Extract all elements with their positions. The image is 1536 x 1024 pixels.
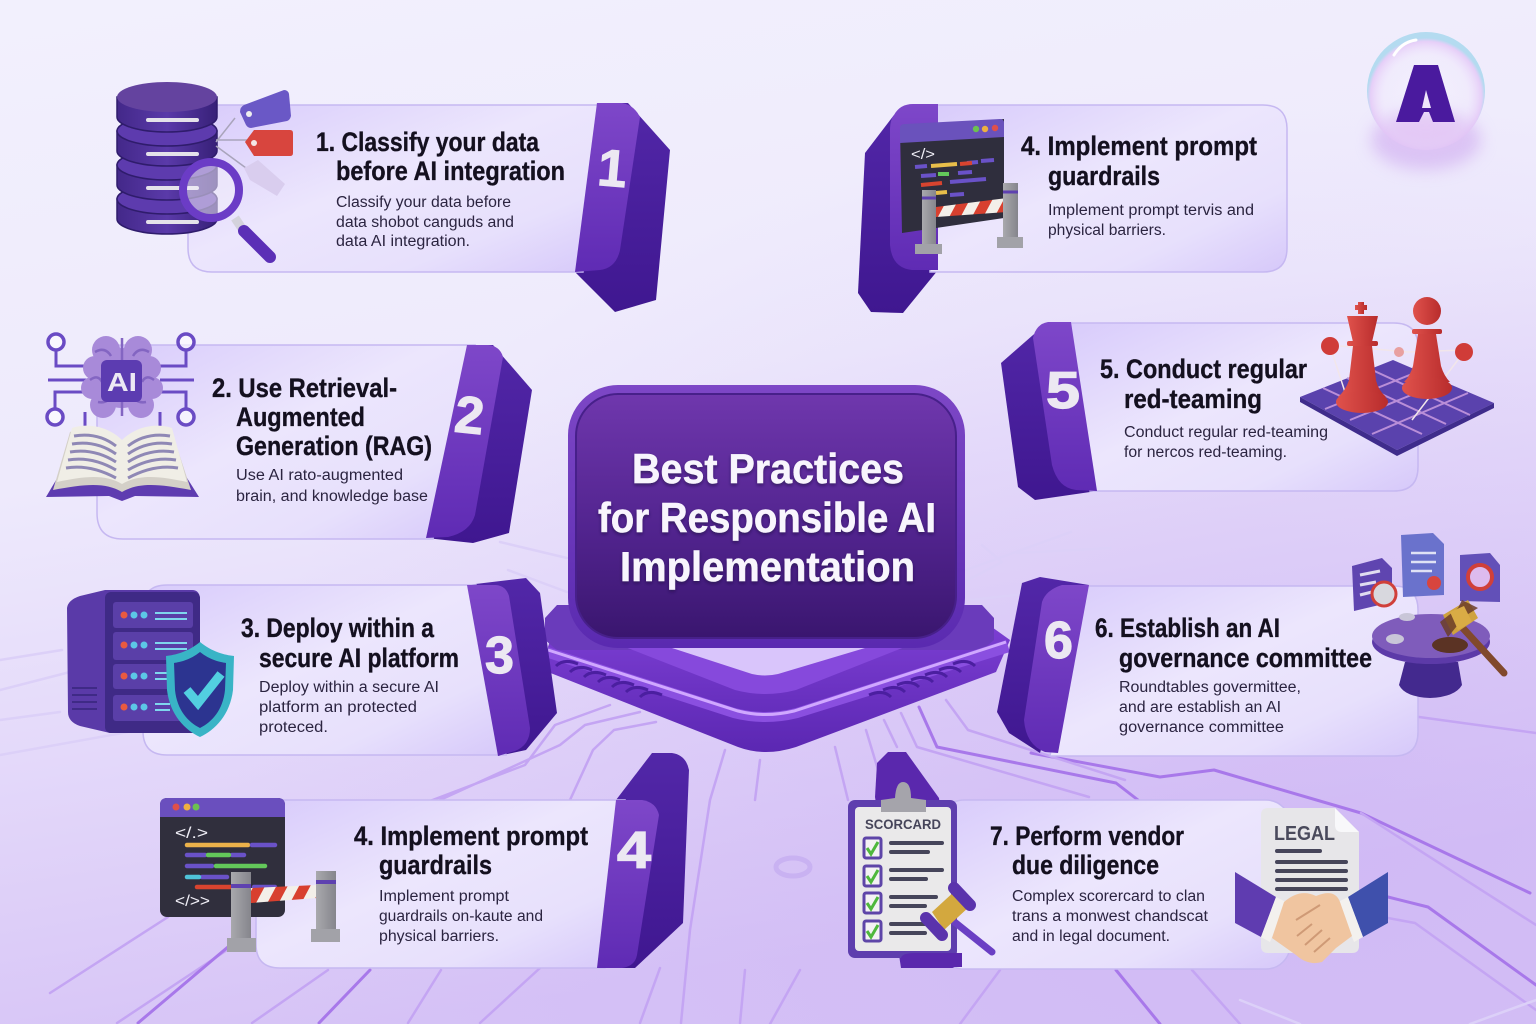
heading [1095,613,1372,673]
icon: code window and barrier [160,798,340,952]
heading: 4. Implement prompt [354,821,588,851]
body text: trans a monwest chandscat [1012,908,1209,925]
title [598,445,936,590]
number 1: 1 [595,139,629,199]
body text: Complex scorercard to clan [1012,888,1205,905]
panel: 2 RAG [46,334,532,543]
body text [379,888,543,945]
heading: 7. Perform vendor [990,821,1184,851]
heading: due diligence [1012,850,1159,880]
heading [1021,131,1257,191]
body text: for nercos red-teaming. [1124,444,1287,461]
body text: proteced. [259,719,328,736]
icon: scorecard clipboard with gavel [848,782,992,967]
heading: 6. Establish an AI [1095,613,1280,643]
heading: guardrails [379,850,492,880]
body text [1048,202,1254,239]
body text: guardrails on-kaute and [379,908,543,925]
body text [1124,424,1328,461]
panel: 1 classify data [117,82,670,312]
panel: 7 vendor due diligence [848,752,1388,969]
heading: red-teaming [1124,384,1262,414]
body text: Implement prompt tervis and [1048,202,1254,219]
icon: code window and barrier: </>> [175,893,210,910]
heading [212,373,432,461]
heading: 1. Classify your data [316,127,539,157]
body text [259,679,439,736]
heading [354,821,588,880]
AI badge text: AI [107,367,137,397]
number 6: 6 [1044,612,1073,670]
icon: legal document and handshake [1235,808,1388,963]
heading: governance committee [1119,643,1372,673]
number 4: 4 [617,822,651,880]
number 2: 2 [452,386,487,446]
body text: Use AI rato-augmented [236,467,403,484]
heading [1100,354,1307,414]
heading: 5. Conduct regular [1100,354,1307,384]
icon: database with tags and magnifier [117,82,293,257]
panel: 3 secure platform [67,578,557,756]
heading: Augmented [236,402,365,432]
scorecard label: SCORCARD [865,817,941,832]
panel: 6 governance [997,533,1504,756]
body text: Roundtables govermittee, [1119,679,1301,696]
body text: and in legal document. [1012,928,1170,945]
icon: chess pieces on board [1300,297,1494,456]
body text: and are establish an AI [1119,699,1281,716]
panel: 4 prompt guardrails (left) [160,753,689,968]
heading: Generation (RAG) [236,431,432,461]
body text [336,194,514,250]
icon: table, documents, gavel [1352,533,1504,698]
heading [241,613,459,673]
legal label: LEGAL [1274,823,1335,845]
heading: 3. Deploy within a [241,613,434,643]
circuit traces [0,532,1536,1024]
icon: server and shield [67,590,234,737]
chip pins [556,661,975,697]
heading: 2. Use Retrieval- [212,373,397,403]
icon: code window and barrier: </> [911,146,935,163]
body text: Deploy within a secure AI [259,679,439,696]
body text [1012,888,1209,945]
body text: Conduct regular red-teaming [1124,424,1328,441]
body text: physical barriers. [379,928,499,945]
central title panel [568,385,965,648]
title: for Responsible AI [598,494,936,541]
heading: before AI integration [336,156,565,186]
body text: data shobot canguds and [336,214,514,231]
heading [990,821,1184,880]
body text [236,467,428,505]
body text: brain, and knowledge base [236,488,428,505]
body text: Implement prompt [379,888,510,905]
number 3: 3 [485,627,514,685]
heading: guardrails [1048,161,1160,191]
icon: AI brain over book [46,334,199,501]
heading [316,127,565,186]
heading: 4. Implement prompt [1021,131,1257,161]
body text: governance committee [1119,719,1284,736]
panel: 5 red-teaming [1001,297,1494,500]
body text: physical barriers. [1048,222,1166,239]
body text: data AI integration. [336,233,470,250]
chip platform [545,605,1010,752]
icon: code window and barrier [900,119,1023,254]
logo: bubble [1367,32,1485,170]
title: Implementation [620,543,915,590]
body text [1119,679,1301,736]
heading: secure AI platform [259,643,459,673]
body text: platform an protected [259,699,417,716]
number 5: 5 [1046,362,1080,420]
icon: code window and barrier: </.> [175,825,208,842]
title: Best Practices [632,445,904,492]
body text: Classify your data before [336,194,511,211]
small ring [776,858,810,876]
panel: 4 prompt guardrails (top right) [858,104,1287,313]
